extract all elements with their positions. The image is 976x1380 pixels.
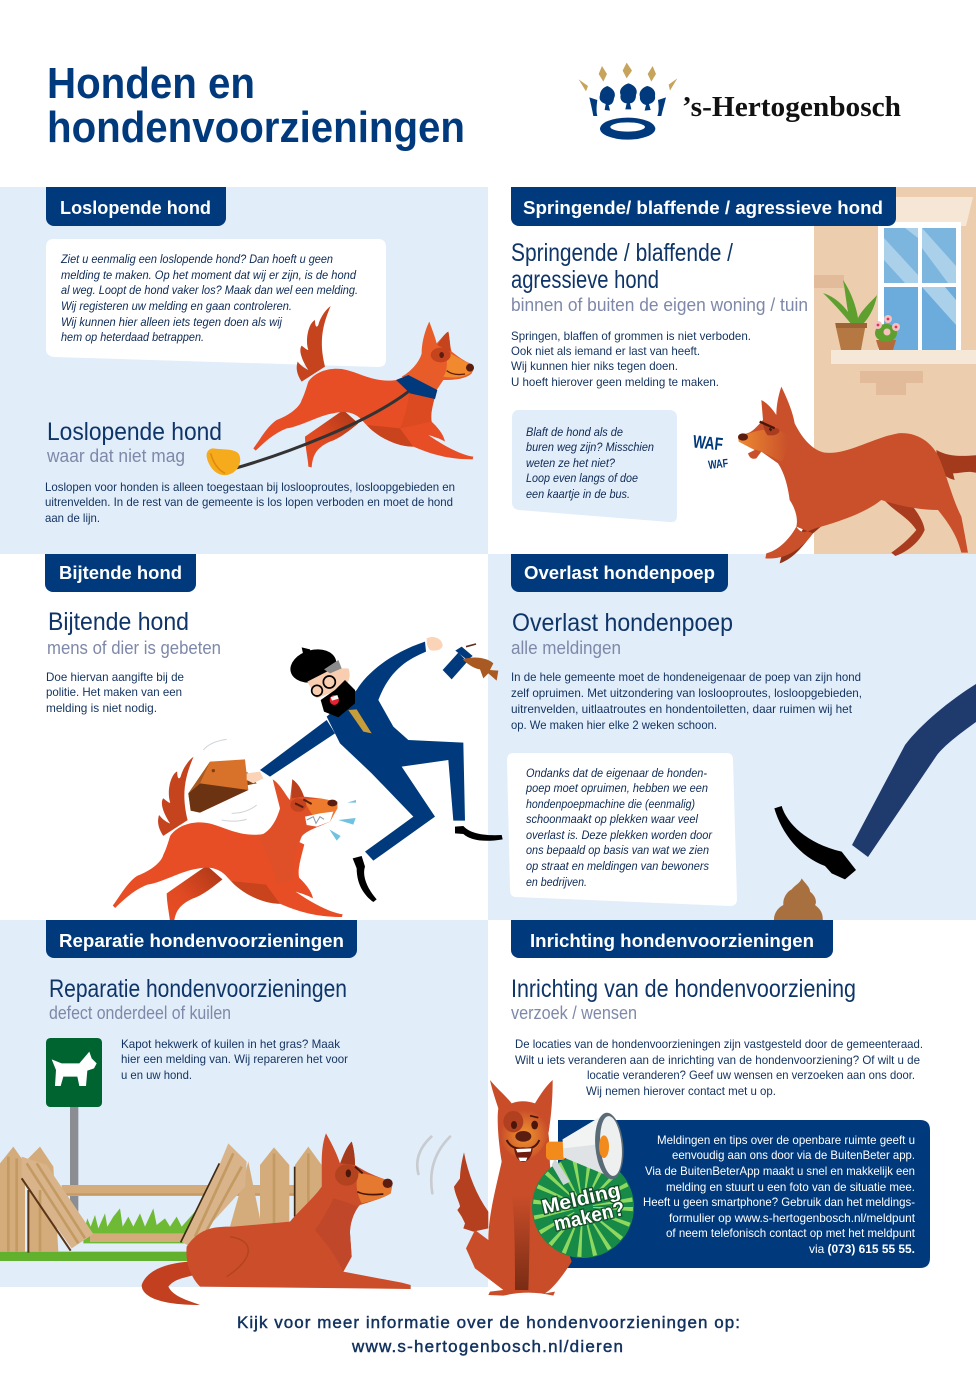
title	[47, 59, 465, 152]
panel: loslopende hond	[45, 187, 474, 525]
text block: aangifte: politie. Het maken van een	[46, 685, 182, 699]
callout: melding maken: formulier op www.s-hertogenbosch.nl/meldpunt	[669, 1211, 916, 1225]
footer: more information: www.s-hertogenbosch.nl/dieren	[351, 1337, 623, 1356]
heading: inrichting: verzoek / wensen	[511, 1003, 637, 1023]
speech bubble: loslopende hond: Wij registeren uw melding en gaan controleren.	[61, 299, 292, 313]
illustration: dog biting man	[113, 637, 503, 925]
tab: springende blaffende agressieve hond: Springende/ blaffende / agressieve hond	[523, 197, 883, 218]
heading: reparatie	[49, 975, 347, 1023]
icon: potted plant	[823, 280, 877, 350]
tab: reparatie hondenvoorzieningen	[46, 920, 357, 958]
panel: bijtende hond	[45, 554, 503, 925]
speech bubble: hondenpoepmachine: poep moet opruimen, hebben we een	[525, 781, 708, 795]
text block: poep opruimen: zelf opruimen. Met uitzondering van loslooproutes, losloopgebieden,	[511, 686, 862, 700]
callout: melding maken: Heeft u geen smartphone? Gebruik dan het meldings-	[643, 1195, 915, 1209]
text block: niet verboden: Ook niet als iemand er last van heeft.	[511, 344, 700, 358]
hands, cup and coffee splash	[247, 637, 498, 783]
tab: springende blaffende agressieve hond	[511, 187, 896, 226]
heading: bijtende hond: mens of dier is gebeten	[47, 638, 221, 658]
callout: melding maken	[558, 1120, 930, 1268]
icon: melding maken badge with megaphone: maken?	[552, 1198, 627, 1236]
text block: poep opruimen: In de hele gemeente moet de hondeneigenaar de poep van zijn hond	[511, 670, 861, 684]
heading: loslopende hond: Loslopende hond	[47, 418, 222, 446]
speech bubble: hondenpoepmachine: hondenpoepmachine die (eenmalig)	[526, 797, 695, 811]
text block: poep opruimen: op. We maken hier elke 2 weken schoon.	[511, 718, 717, 732]
heading: bijtende hond: Bijtende hond	[48, 608, 189, 636]
tab: loslopende hond: Loslopende hond	[60, 197, 211, 218]
speech bubble: loslopende hond: al weg. Loopt de hond vaker los? Maak dan wel een melding.	[61, 283, 358, 297]
man head	[287, 645, 372, 733]
illustration: running dog on leash	[207, 306, 474, 475]
text block: locaties: De locaties van de hondenvoorzieningen zijn vastgesteld door de gemeenteraad.	[515, 1037, 923, 1051]
callout: melding maken: Via de BuitenBeterApp maakt u snel en makkelijk een	[645, 1164, 915, 1178]
callout: melding maken: via (073) 615 55 55.	[809, 1242, 915, 1256]
icon: waf waf bark: WAF	[707, 456, 729, 472]
speech bubble: loslopende hond: Wij kunnen hier alleen iets tegen doen als wij	[61, 315, 282, 329]
heading: loslopende hond	[46, 418, 222, 466]
text block: kapot hekwerk: hier een melding van. Wij repareren het voor	[121, 1052, 348, 1066]
text block: kapot hekwerk: Kapot hekwerk of kuilen in het gras? Maak	[121, 1037, 341, 1051]
text block: niet verboden: Springen, blaffen of grommen is niet verboden.	[511, 329, 751, 343]
heading: overlast hondenpoep: Overlast hondenpoep	[512, 609, 733, 637]
text block: loslopen rules: Loslopen voor honden is alleen toegestaan bij loslooproutes, losloopgebieden en	[45, 480, 455, 494]
heading: springende hond: Springende / blaffende /	[511, 239, 733, 267]
text block: aangifte: Doe hiervan aangifte bij de	[46, 670, 184, 684]
footer: more information	[237, 1313, 740, 1356]
speech bubble: loslopende hond: hem op heterdaad betrappen.	[61, 330, 204, 344]
speech bubble: hondenpoepmachine: en bedrijven.	[526, 875, 587, 889]
text block: loslopen rules: uitrenvelden. In de rest van de gemeente is los lopen verboden en moet de hond	[45, 495, 453, 509]
speech bubble: loslopende hond	[46, 239, 386, 367]
heading: reparatie: Reparatie hondenvoorzieningen	[49, 975, 347, 1003]
text block: locaties: locatie veranderen? Geef uw wensen en verzoeken aan ons door.	[587, 1068, 915, 1082]
speech bubble: buren: buren weg zijn? Misschien	[526, 440, 654, 454]
callout: melding maken: melding en stuurt u een foto van de situatie mee.	[666, 1180, 915, 1194]
panel: inrichting hondenvoorzieningen	[454, 920, 930, 1296]
dog body	[113, 757, 343, 925]
panel background: overlast hondenpoep	[488, 554, 976, 920]
icon: melding maken badge with megaphone: Melding	[540, 1179, 623, 1219]
dog head	[257, 779, 337, 883]
heading: bijtende hond	[47, 608, 221, 658]
icon: flower pot	[874, 315, 900, 350]
text block: aangifte: melding is niet nodig.	[46, 701, 157, 715]
text block: aangifte	[46, 670, 184, 715]
logo: 's-Hertogenbosch crown	[579, 63, 901, 140]
heading: overlast hondenpoep: alle meldingen	[511, 638, 621, 658]
heading: reparatie: defect onderdeel of kuilen	[49, 1003, 231, 1023]
illustration: house facade with window and plants	[814, 187, 976, 554]
logo: 's-Hertogenbosch crown: ’s-Hertogenbosch	[682, 92, 901, 123]
text block: poep opruimen: uitrenvelden, uitlaatroutes en hondentoiletten, daar ruimen wij het	[511, 702, 853, 716]
speech bubble: buren: Loop even langs of doe	[526, 471, 638, 485]
icon: dog sign	[46, 1038, 102, 1212]
speech bubble: loslopende hond: melding te maken. Op het moment dat wij er zijn, is de hond	[61, 268, 356, 282]
tab: inrichting hondenvoorzieningen: Inrichting hondenvoorzieningen	[530, 930, 814, 951]
speech bubble: buren: Blaft de hond als de	[526, 425, 623, 439]
text block: niet verboden	[511, 329, 751, 389]
text block: locaties: Wilt u iets veranderen aan de inrichting van de hondenvoorziening? Of wilt u de	[515, 1053, 920, 1067]
callout: melding maken: of neem telefonisch contact op met het meldpunt	[666, 1226, 916, 1240]
text block: poep opruimen	[511, 670, 862, 732]
speech bubble: hondenpoepmachine: op straat en meldingen van bewoners	[526, 859, 709, 873]
callout: melding maken: Meldingen en tips over de openbare ruimte geeft u	[657, 1133, 915, 1147]
speech bubble: hondenpoepmachine: ons bepaald op basis van wat we zien	[526, 843, 709, 857]
lying dog	[142, 1133, 411, 1305]
text block: loslopen rules	[45, 480, 455, 525]
tab: bijtende hond: Bijtende hond	[59, 562, 182, 583]
tab: bijtende hond	[45, 554, 196, 592]
speech bubble: buren: weten ze het niet?	[526, 456, 615, 470]
text block: loslopen rules: aan de lijn.	[45, 511, 100, 525]
text block: niet verboden: U hoeft hierover geen melding te maken.	[511, 375, 719, 389]
heading: springende hond: agressieve hond	[511, 266, 659, 294]
heading: inrichting	[511, 975, 856, 1023]
speech bubble: hondenpoepmachine: Ondanks dat de eigenaar de honden-	[526, 766, 707, 780]
text block: locaties	[515, 1037, 923, 1098]
man suit	[260, 642, 465, 861]
icon: motion and bark shards	[203, 739, 356, 841]
speech bubble: buren: een kaartje in de bus.	[526, 487, 630, 501]
title: Honden en	[47, 59, 255, 108]
illustration: leg stepping towards dog poop	[774, 684, 976, 922]
panel: reparatie hondenvoorzieningen	[0, 920, 450, 1305]
tab: overlast hondenpoep: Overlast hondenpoep	[524, 562, 715, 583]
panel background: loslopende hond	[0, 187, 488, 554]
heading: springende hond: binnen of buiten de eigen woning / tuin	[511, 295, 808, 315]
panel background: reparatie hondenvoorzieningen	[0, 920, 488, 1287]
text block: locaties: Wij nemen hierover contact met u op.	[586, 1084, 776, 1098]
heading: inrichting: Inrichting van de hondenvoorziening	[511, 975, 856, 1003]
text block: kapot hekwerk: u en uw hond.	[121, 1068, 192, 1082]
speech bubble: hondenpoepmachine: schoonmaakt op plekken waar veel	[526, 812, 698, 826]
speech bubble: buren	[512, 410, 677, 522]
tab: inrichting hondenvoorzieningen	[511, 920, 833, 958]
title: hondenvoorzieningen	[47, 103, 465, 152]
icon: waf waf bark: WAF	[692, 431, 724, 455]
panel: overlast hondenpoep	[507, 554, 976, 922]
heading: springende hond	[511, 239, 808, 315]
heading: loslopende hond: waar dat niet mag	[46, 446, 185, 466]
tab: overlast hondenpoep	[511, 554, 728, 592]
speech bubble: hondenpoepmachine: overlast is. Deze plekken worden door	[526, 828, 713, 842]
illustration: broken fence, sign and lying dog	[0, 1038, 450, 1305]
fence and grass	[0, 1143, 322, 1261]
callout: melding maken: eenvoudig aan ons door via de BuitenBeter app.	[672, 1148, 915, 1162]
illustration: sitting dog	[454, 1080, 572, 1296]
tab: loslopende hond	[46, 187, 226, 226]
tab: reparatie hondenvoorzieningen: Reparatie hondenvoorzieningen	[59, 930, 344, 951]
man shoes	[353, 826, 503, 902]
heading: overlast hondenpoep	[511, 609, 733, 658]
text block: niet verboden: Wij kunnen hier niks tegen doen.	[511, 359, 678, 373]
speech bubble: hondenpoepmachine	[507, 753, 737, 906]
icon: wag marks	[417, 1137, 450, 1193]
illustration: barking dog	[738, 387, 976, 563]
text block: kapot hekwerk	[121, 1037, 348, 1082]
icon: waf waf bark	[692, 431, 729, 472]
briefcase	[188, 759, 257, 813]
speech bubble: loslopende hond: Ziet u eenmalig een loslopende hond? Dan hoeft u geen	[60, 252, 333, 266]
footer: more information: Kijk voor meer informatie over de hondenvoorzieningen op:	[237, 1313, 740, 1332]
icon: megaphone	[546, 1112, 626, 1185]
panel: springende blaffende agressieve hond	[511, 187, 976, 563]
icon: melding maken badge with megaphone	[532, 1112, 634, 1258]
